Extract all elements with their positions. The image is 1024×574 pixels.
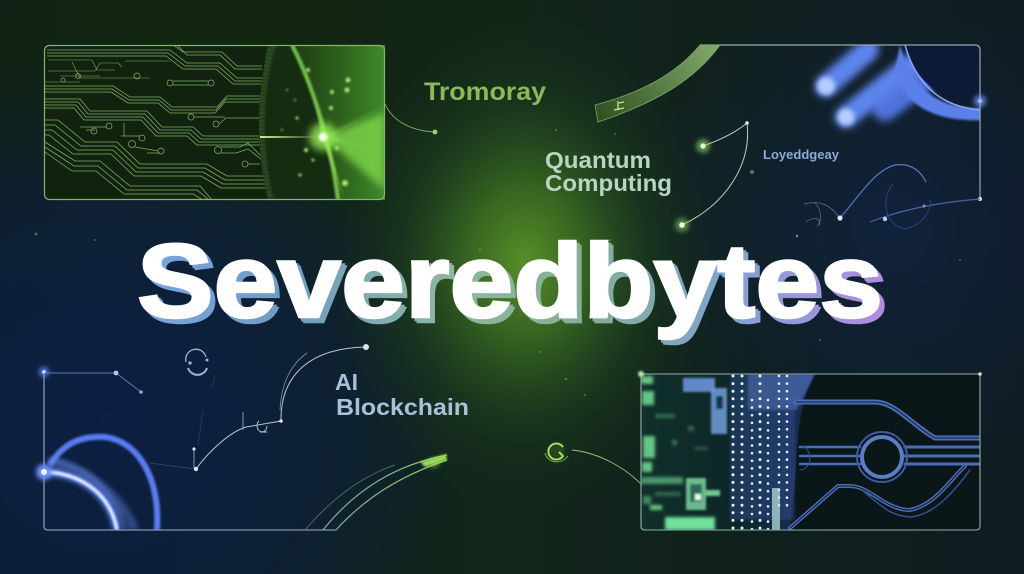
label: Quantum Computing: Quantum (545, 147, 651, 173)
blue rings (44, 437, 157, 530)
title: Severedbytes (137, 223, 888, 345)
circuit traces (44, 45, 266, 200)
label: Quantum Computing (545, 147, 672, 196)
label: AI Blockchain (335, 369, 469, 420)
green arc band (595, 45, 720, 122)
dotted columns (733, 376, 787, 530)
loop icon (186, 349, 208, 375)
connector network (150, 344, 369, 471)
blue circuit traces (790, 402, 980, 528)
title extrusion shadow: Severedbytes (142, 228, 888, 345)
glowing planet image (255, 45, 385, 200)
panel: bottom left frame with blue rings (36, 344, 447, 530)
blue speckle haze (730, 374, 815, 520)
label: AI Blockchain: Blockchain (336, 394, 469, 420)
label: Quantum Computing: Computing (545, 170, 672, 196)
frame line (700, 45, 980, 199)
dark lens with ring (906, 45, 980, 102)
small glyph on arc (614, 101, 624, 110)
lens ring fill (895, 45, 985, 120)
connector (385, 104, 437, 134)
title face: Severedbytes (137, 223, 883, 340)
top node line (44, 371, 143, 394)
frame line (44, 372, 336, 530)
green arc lines (305, 454, 447, 530)
panel: circuit board, top left (44, 45, 385, 200)
icon: green loop with connector (545, 443, 641, 484)
data image (641, 374, 815, 530)
label text: Tromoray (424, 78, 546, 106)
label: AI Blockchain: AI (335, 369, 358, 395)
panel border (641, 374, 980, 530)
arc connector with nodes (675, 121, 754, 232)
panel border (44, 46, 384, 200)
label: Loyeddgeay: Loyeddgeay (763, 148, 839, 162)
panel: data and circuit, bottom right (638, 371, 982, 530)
blue network lines (796, 165, 980, 237)
blue glow fingers (817, 40, 985, 126)
title extrusion shadow: Severedbytes (140, 226, 886, 343)
label: Tromoray with connector (385, 78, 546, 134)
panel: top right frame with blue glow (595, 40, 986, 237)
